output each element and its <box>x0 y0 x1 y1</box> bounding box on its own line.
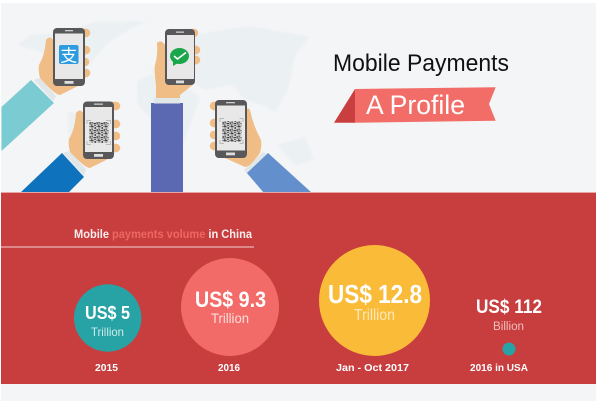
arm and hand: top left phone <box>2 28 86 151</box>
heading: Mobile payments volume in China <box>74 229 253 241</box>
phone <box>165 29 195 85</box>
hand <box>69 110 110 168</box>
circle: 2016: 2016 <box>218 362 240 374</box>
hand <box>155 41 195 98</box>
circle: 2015: 2015 <box>95 362 118 374</box>
circle: 2017: Jan - Oct 2017 <box>336 362 409 374</box>
circle: 2015: Trillion <box>91 325 124 339</box>
cuff <box>154 98 180 104</box>
circle: 2016: Trillion <box>211 310 249 326</box>
cuff <box>244 152 267 173</box>
phone <box>83 102 114 159</box>
arm and hand: lower left phone <box>20 102 116 193</box>
QR code <box>87 120 110 144</box>
sleeve <box>151 103 183 193</box>
cuff <box>63 151 86 176</box>
circle: USA 2016: 2016 in USA <box>470 362 528 374</box>
circle: 2017: US$ 12.8 <box>328 279 422 309</box>
circle: 2017 <box>319 245 430 374</box>
circle: USA 2016: Billion <box>493 321 524 333</box>
hand <box>39 38 80 95</box>
sleeve <box>2 80 54 151</box>
QR code <box>220 118 243 144</box>
ribbon: A Profile: A Profile <box>366 90 465 120</box>
hand <box>225 108 261 167</box>
world map <box>17 21 314 167</box>
circle: 2016: US$ 9.3 <box>195 287 266 312</box>
phone <box>53 28 85 86</box>
icon: wechat <box>170 48 189 66</box>
panel: payments volume <box>1 192 596 384</box>
circle: 2015: US$ 5 <box>85 303 130 323</box>
arm and hand: centre phone <box>151 29 196 193</box>
circle: 2017: Trillion <box>354 307 395 324</box>
circle: 2015 <box>74 284 141 374</box>
circle: USA 2016 <box>470 297 542 374</box>
arm and hand: right phone <box>214 100 312 193</box>
sleeve <box>20 153 84 193</box>
title: Mobile Payments <box>333 50 509 77</box>
circle: USA 2016: US$ 112 <box>476 297 542 318</box>
cuff <box>34 78 56 101</box>
ribbon: A Profile <box>334 87 496 123</box>
icon: alipay: 支 <box>60 46 77 66</box>
phone <box>215 100 247 158</box>
circle: 2016 <box>181 258 279 374</box>
sleeve <box>246 153 312 193</box>
